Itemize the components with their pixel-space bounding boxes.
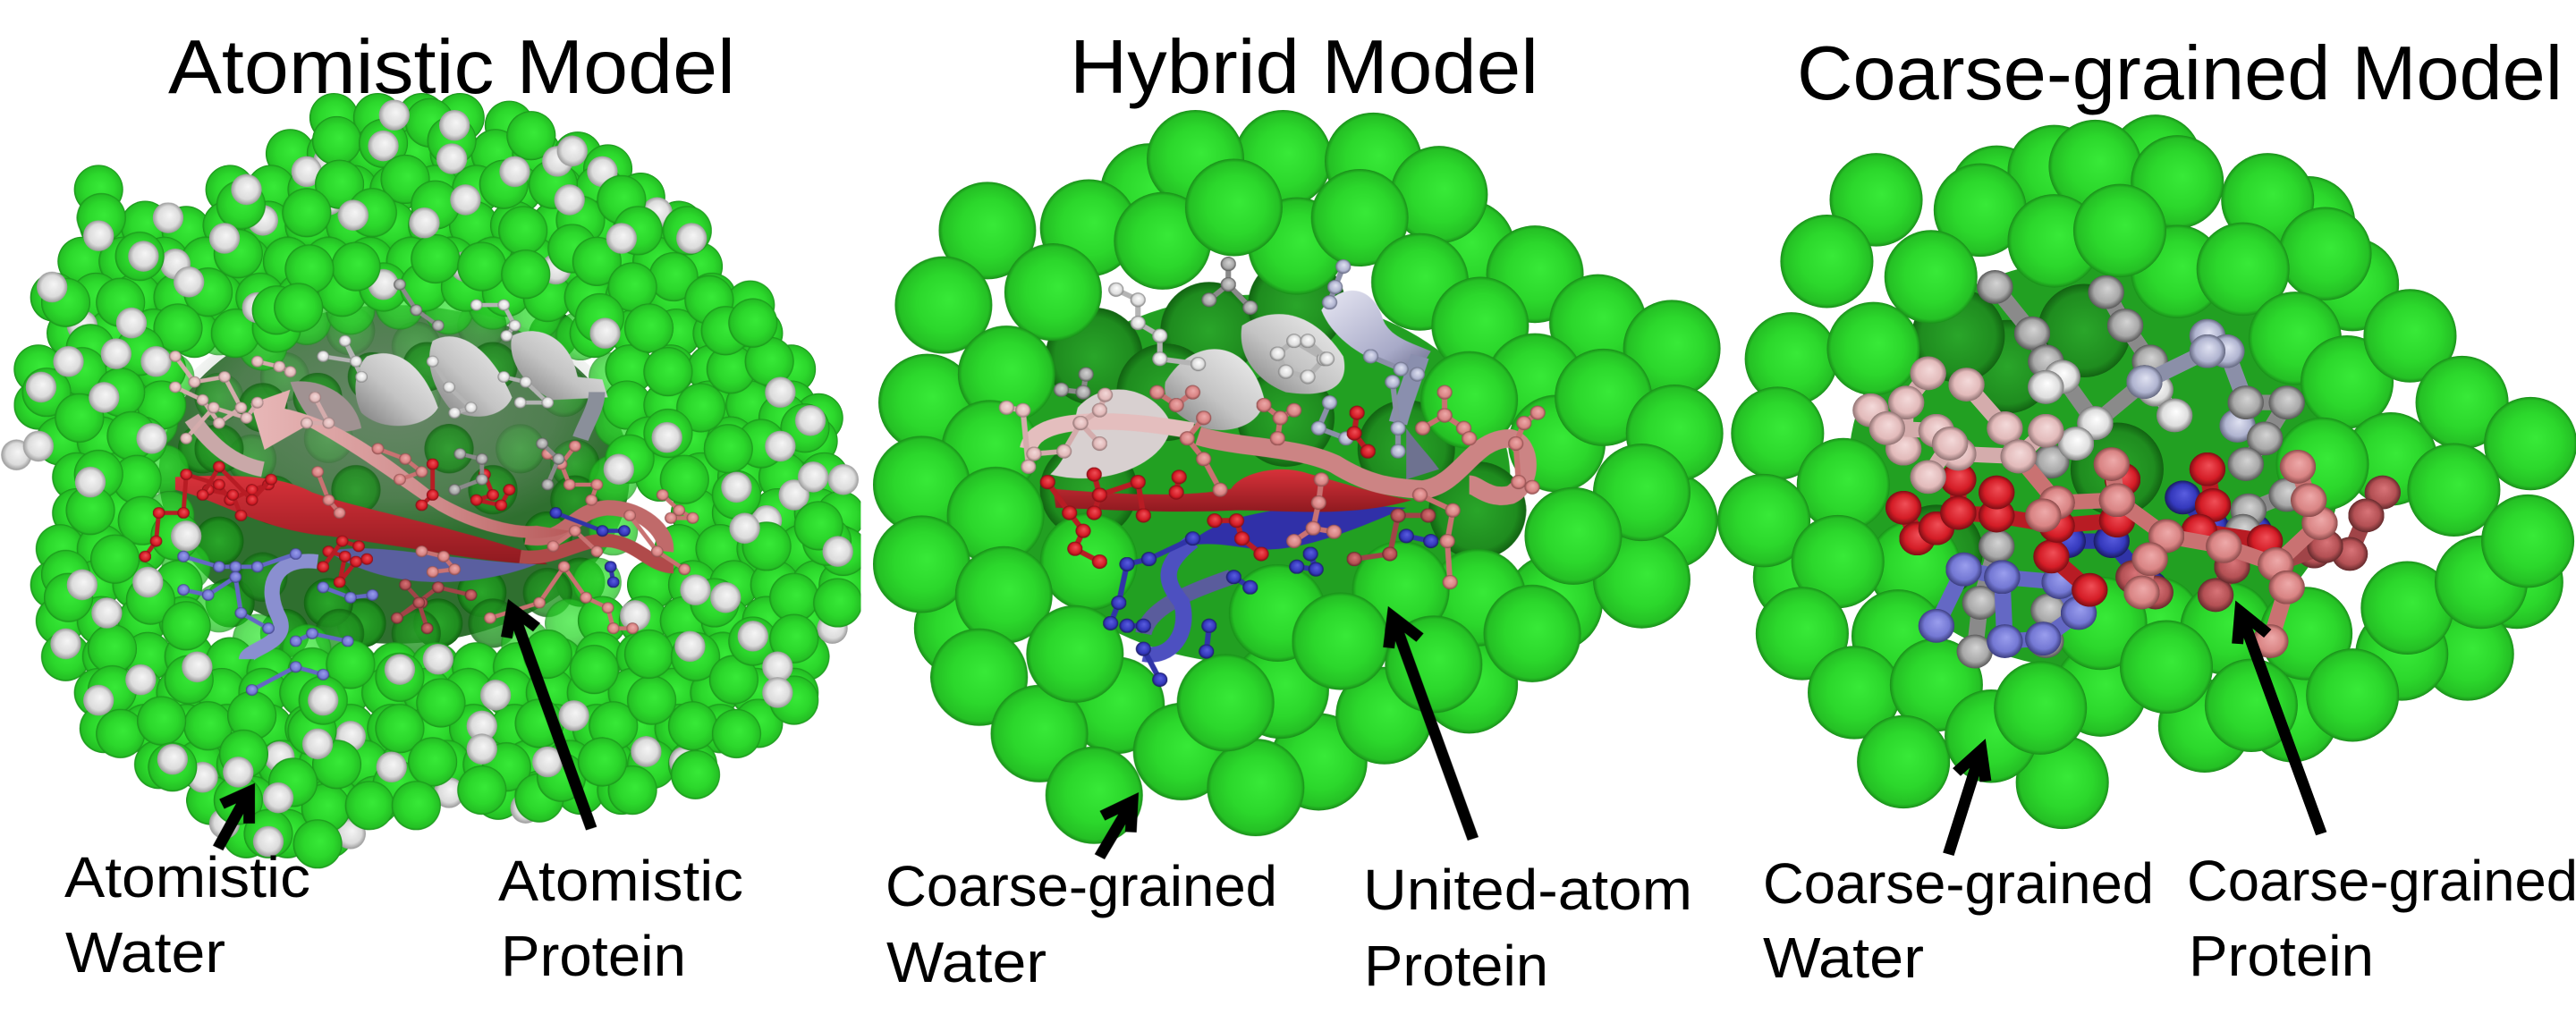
label: United-atom Protein	[1363, 858, 1692, 998]
panel: atomistic model	[1, 93, 868, 868]
label: Atomistic Protein: Atomistic	[498, 849, 743, 913]
label: United-atom Protein: Protein	[1364, 934, 1548, 998]
title: Atomistic Model: Atomistic Model	[168, 25, 735, 110]
panel: hybrid model	[873, 110, 1724, 857]
arrow: coarse-grained protein	[2238, 612, 2321, 833]
arrow: coarse-grained water	[1099, 801, 1132, 857]
label: United-atom Protein: United-atom	[1363, 858, 1692, 922]
label: Coarse-grained Protein: Coarse-grained	[2187, 849, 2576, 913]
label: Coarse-grained Water (hybrid): Water	[886, 930, 1046, 994]
arrow: united-atom protein	[1389, 616, 1473, 839]
label: Coarse-grained Water	[1763, 851, 2154, 990]
label: Coarse-grained Protein: Protein	[2189, 924, 2374, 988]
hybrid protein ribbons	[1029, 291, 1527, 655]
arrow: atomistic protein	[506, 609, 591, 829]
hybrid protein side chains	[1006, 264, 1538, 680]
label: Coarse-grained Protein	[2187, 849, 2576, 988]
label: Coarse-grained Water: Coarse-grained	[1763, 851, 2154, 916]
atomistic protein ribbons	[175, 331, 674, 659]
label: Coarse-grained Water: Water	[1763, 926, 1924, 990]
label: Atomistic Water	[64, 845, 310, 985]
coarse-grained protein beads	[1870, 287, 2383, 652]
title: Hybrid Model: Hybrid Model	[1070, 25, 1538, 110]
coarse-grained water spheres	[873, 110, 1724, 844]
label: Atomistic Protein	[498, 849, 743, 988]
label: Atomistic Water: Water	[65, 920, 225, 985]
title: Coarse-grained Model: Coarse-grained Model	[1797, 31, 2563, 116]
label: Coarse-grained Water (hybrid): Coarse-grained	[886, 854, 1277, 918]
coarse-grained water spheres	[1717, 114, 2576, 829]
arrow: atomistic water	[218, 791, 250, 848]
atomistic water spheres	[1, 93, 868, 868]
label: Atomistic Protein: Protein	[501, 924, 686, 988]
panel: coarse-grained model	[1717, 114, 2576, 854]
arrow: coarse-grained water	[1948, 750, 1986, 854]
label: Coarse-grained Water (hybrid)	[886, 854, 1277, 994]
label: Atomistic Water: Atomistic	[64, 845, 310, 909]
atomistic protein side chains	[145, 284, 692, 690]
